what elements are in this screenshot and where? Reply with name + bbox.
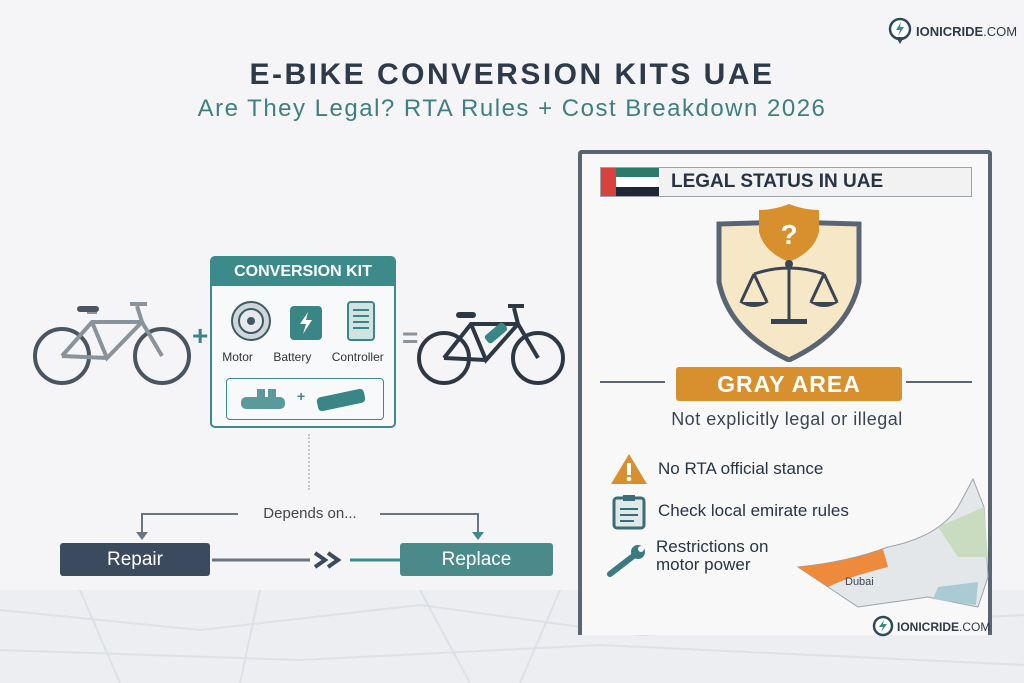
inner parts box: + <box>297 388 305 404</box>
item: motor power restrictions <box>607 537 768 577</box>
button: repair: Repair <box>107 549 163 570</box>
icon: motor <box>231 301 271 341</box>
dotted connector <box>308 434 310 490</box>
depends on text: Depends on... <box>263 505 357 522</box>
item: motor power restrictions: motor power <box>656 555 750 574</box>
icon: controller <box>347 301 375 341</box>
logo bottom: IONICRIDE.COM <box>897 620 990 634</box>
labels: Battery <box>273 350 311 364</box>
labels <box>222 350 384 364</box>
icon: e-bike <box>417 304 565 385</box>
logo top: IONICRIDE.COM <box>916 24 1017 38</box>
map of UAE <box>796 478 988 608</box>
icon: shield with scales <box>716 204 862 362</box>
arrows to options <box>136 513 484 540</box>
labels: Motor <box>222 350 253 364</box>
item: check emirate rules <box>612 495 849 530</box>
divider lines <box>600 381 665 383</box>
arrow: repair to replace <box>212 551 400 569</box>
logo bottom <box>872 616 990 636</box>
header bar: LEGAL STATUS IN UAE <box>671 171 883 192</box>
map of UAE: Dubai <box>845 576 874 588</box>
button: replace: Replace <box>442 549 511 570</box>
button: repair <box>60 543 210 576</box>
item: no RTA stance <box>611 454 823 484</box>
icon: UAE flag <box>601 168 659 196</box>
kit heading <box>212 258 394 286</box>
icon: battery <box>290 306 322 340</box>
item: motor power restrictions: Restrictions on <box>656 537 768 556</box>
labels: Controller <box>332 350 384 364</box>
header bar <box>600 167 972 197</box>
gray area badge <box>676 367 902 401</box>
kit heading: CONVERSION KIT <box>234 263 372 280</box>
equals: = <box>402 322 418 353</box>
item: check emirate rules: Check local emirate rules <box>658 501 849 520</box>
title: E-BIKE CONVERSION KITS UAE <box>249 58 775 91</box>
subtitle: Are They Legal? RTA Rules + Cost Breakdown 2026 <box>198 95 826 122</box>
button: replace <box>400 543 553 576</box>
logo top <box>888 18 1017 44</box>
item: no RTA stance: No RTA official stance <box>658 459 823 478</box>
icon: shield with scales: ? <box>780 219 798 250</box>
background map pattern <box>0 590 1024 683</box>
panel: legal status <box>578 150 992 635</box>
panel: conversion kit <box>210 256 396 428</box>
inner parts box <box>226 378 384 420</box>
icon: regular bike <box>33 302 191 385</box>
plus: + <box>192 320 208 351</box>
gray area badge: GRAY AREA <box>717 371 861 397</box>
subtext: Not explicitly legal or illegal <box>671 409 903 429</box>
